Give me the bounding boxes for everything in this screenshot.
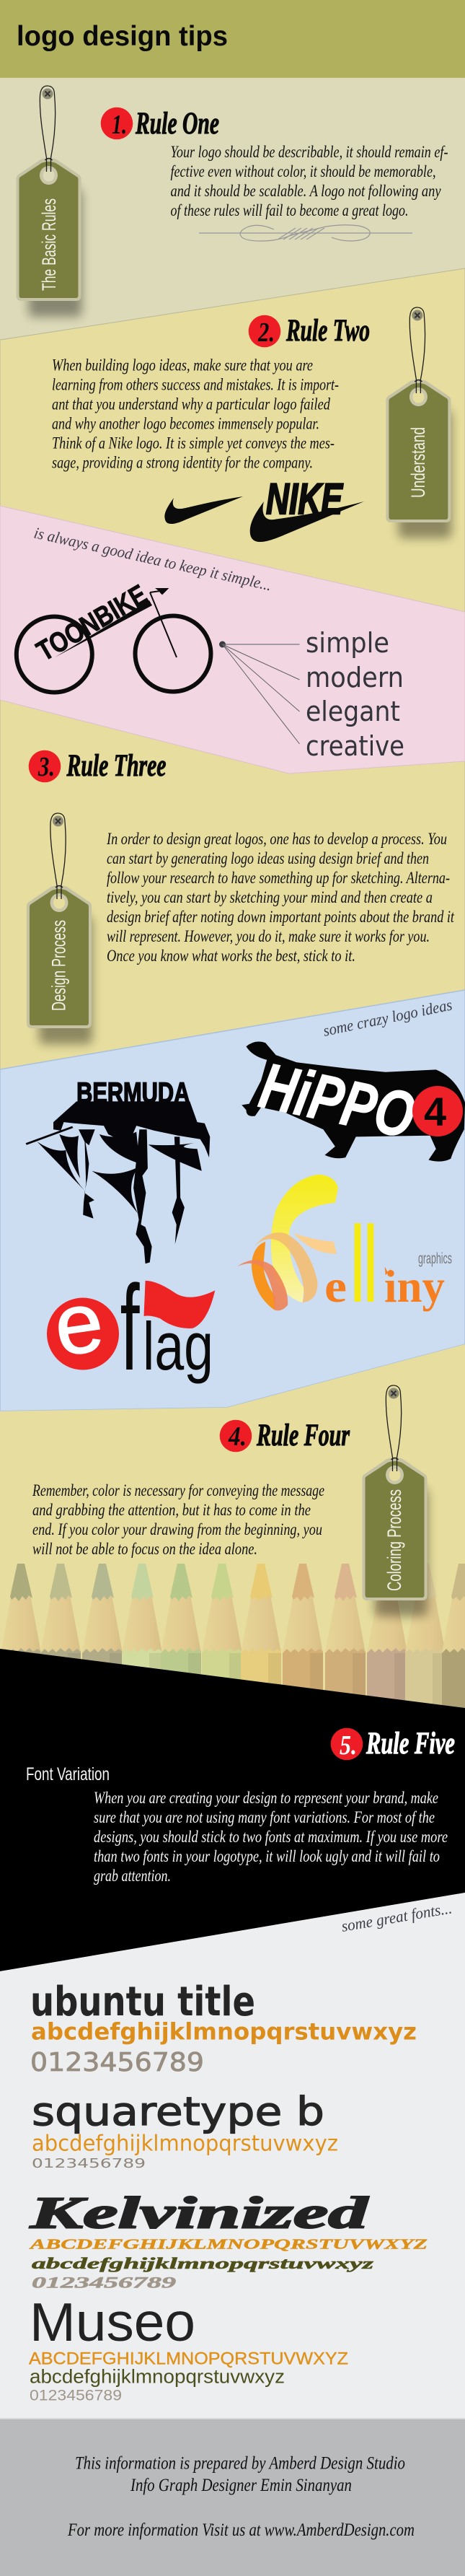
font sample: squaretype b [32,2089,338,2171]
panel: great fonts [0,1893,465,2419]
word list: creative [306,730,404,762]
font sample: museo: Museo [30,2292,195,2352]
logo: felliny graphics: ll [351,1204,377,1325]
panel: rule two and three background [0,268,465,1069]
panel: rule four [0,1344,465,1751]
logo: hippo4: HiPPO [254,1050,421,1152]
tag: design process [27,813,92,1044]
heading: rule two: Rule Two [285,314,370,348]
text block: rule two: learning from others success and mistakes. It is import- [52,375,339,394]
logo: toonbike: TOONBIKE [32,579,153,667]
logo: toonbike [17,579,211,693]
font sample: kelvinized: Kelvinized [29,2189,369,2238]
logo: eflag: f [120,1260,140,1396]
logo: felliny graphics: iny [384,1261,445,1312]
font sample: museo [29,2292,348,2404]
title: logo design tips [17,21,228,52]
heading: rule two [249,314,370,348]
tag: the basic rules [16,86,82,317]
font sample: ubuntu title [30,1979,417,2077]
font sample: squaretype b: squaretype b [32,2089,324,2134]
logo: nike wordmark with swoosh [250,475,364,542]
font sample: museo: abcdefghijklmnopqrstuvwxyz [30,2365,285,2387]
font sample: kelvinized: 0123456789 [32,2273,176,2292]
heading: rule four [220,1419,350,1453]
tag: coloring process [362,1385,428,1616]
heading: rule four: Rule Four [256,1419,350,1453]
logo: eflag: lag [143,1308,213,1384]
panel: rule five [0,1649,465,1971]
font sample: museo: 0123456789 [30,2387,122,2404]
logo: eflag [47,1260,215,1396]
logo: hippo4: 4 [424,1089,446,1134]
panel: rule two content [52,307,451,542]
text block: rule two: sage, providing a strong identity for the company. [52,453,313,472]
panel: rule three content [27,749,454,1044]
caption: crazy logos: some crazy logo ideas [322,996,453,1040]
text block: rule two: and why another logo becomes immensely popular. [52,414,319,433]
logo: bermuda ship: BERMUDA [76,1077,190,1109]
font sample: ubuntu title: 0123456789 [30,2048,204,2077]
text block: rule four: will not be able to focus on the idea alone. [32,1540,257,1558]
header banner [0,0,465,78]
heading: rule one [101,107,219,141]
heading: rule three: Rule Three [66,749,166,783]
logo: nike swoosh [164,496,243,524]
logo: felliny graphics: e [324,1261,347,1312]
text block: rule two: Think of a Nike logo. It is simple yet conveys the mes- [52,434,335,452]
heading: rule two: 2. [257,317,275,348]
panel: footer credits [0,2419,465,2576]
tag: the basic rules: The Basic Rules [38,198,60,291]
word list: modern [306,662,404,693]
font sample: museo: ABCDEFGHIJKLMNOPQRSTUVWXYZ [29,2349,348,2368]
caption: keep it simple: is always a good idea to keep it simple... [32,523,273,594]
tag: understand: Understand [407,427,429,498]
font sample: squaretype b: abcdefghijklmnopqrstuvwxyz [32,2132,338,2156]
panel: rule one [0,78,465,340]
connector lines [219,641,300,744]
font sample: ubuntu title: abcdefghijklmnopqrstuvwxyz [31,2018,417,2045]
word list: elegant [306,696,400,727]
text block: rule one [170,143,448,219]
heading: rule five: 5. [340,1730,357,1761]
font sample: ubuntu title: ubuntu title [30,1979,255,2025]
word list: simple [306,627,389,659]
text block: rule five: grab attention. [94,1867,171,1885]
colored pencils image [1,1564,465,1751]
text block: rule three [106,830,454,965]
text block: rule two: When building logo ideas, make sure that you are [52,356,313,374]
panel: footer credits: This information is prepared by Amberd Design Studio [75,2453,405,2474]
font sample: kelvinized: ABCDEFGHIJKLMNOPQRSTUVWXYZ [28,2237,428,2253]
word list [306,627,404,762]
font sample: kelvinized [28,2189,428,2292]
panel: keep it simple [0,506,465,774]
text block: rule four [32,1481,324,1558]
heading: rule three [29,749,167,783]
text block: rule four: and grabbing the attention, but it has to come in the [32,1501,311,1519]
text block: rule five [94,1789,448,1885]
tag: understand [386,307,451,538]
heading: rule one: Rule One [135,107,219,141]
font sample: kelvinized: abcdefghijklmnopqrstuvwxyz [32,2254,374,2272]
heading: rule five [331,1727,455,1761]
font sample: squaretype b: 0123456789 [32,2156,146,2171]
ornament divider [199,225,412,241]
logo: nike wordmark with swoosh: NIKE [266,475,343,523]
logo: bermuda ship [26,1077,210,1263]
text block: rule four: Remember, color is necessary for conveying the message [32,1481,324,1499]
panel: footer credits: Info Graph Designer Emin Sinanyan [130,2476,352,2495]
logo: eflag: e [48,1274,109,1375]
tag: coloring process: Coloring Process [384,1489,405,1591]
heading: rule one: 1. [112,110,127,140]
heading: rule three: 3. [37,752,55,782]
tag: design process: Design Process [48,920,69,1011]
panel: crazy logo ideas [0,990,465,1411]
caption: great fonts: some great fonts... [340,1898,453,1935]
heading: rule four: 4. [228,1421,247,1452]
text block: rule two: ant that you understand why a particular logo failed [52,395,330,413]
subheading: font variation: Font Variation [26,1764,110,1784]
logo: felliny graphics [237,1175,452,1325]
text block: rule two [52,356,339,472]
text block: rule four: end. If you color your drawing from the beginning, you [32,1520,322,1538]
text block: rule three: Once you know what works the best, stick to it. [107,947,355,965]
